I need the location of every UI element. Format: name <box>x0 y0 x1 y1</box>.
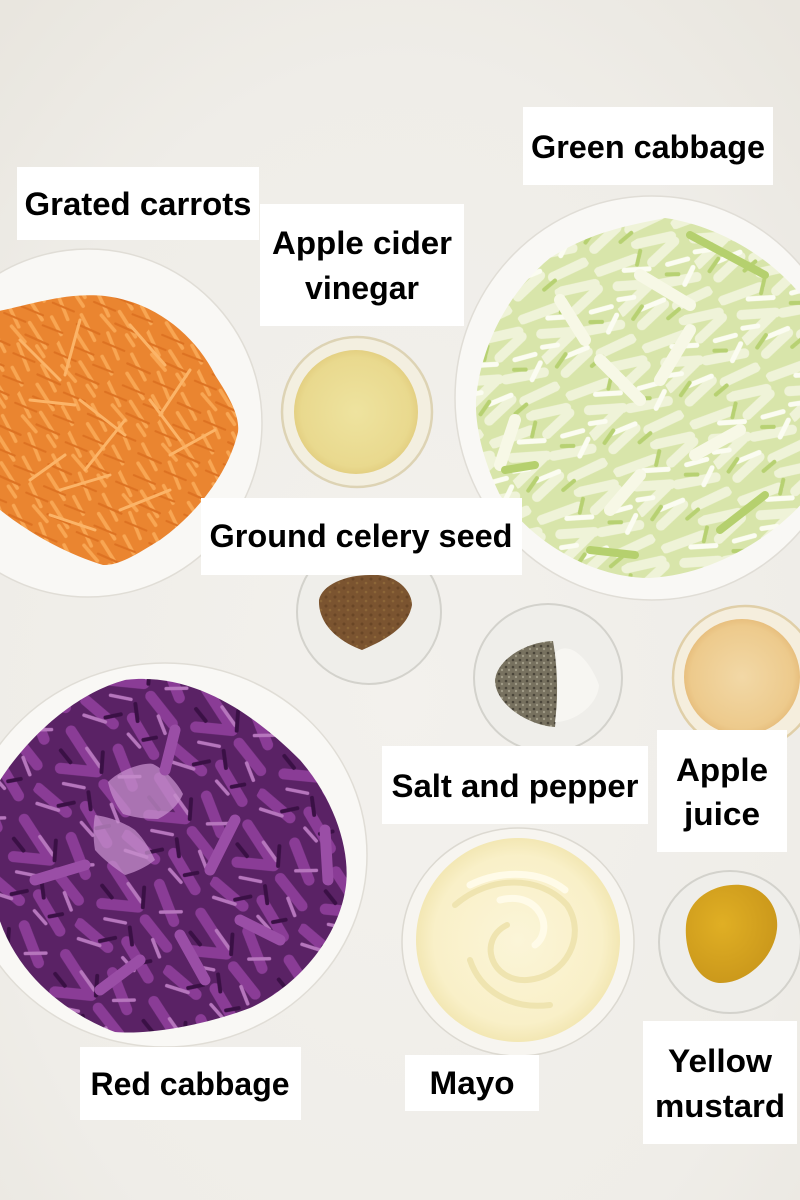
bowl: green cabbage <box>455 196 800 600</box>
label: yellow mustard: mustard <box>655 1088 785 1124</box>
label: yellow mustard <box>643 1021 797 1144</box>
label: mayo <box>405 1055 539 1111</box>
label: ground celery seed <box>201 498 522 575</box>
bowl: apple juice <box>673 606 800 750</box>
label: red cabbage: Red cabbage <box>90 1066 290 1102</box>
label: red cabbage <box>80 1047 301 1120</box>
label: apple juice: juice <box>683 796 760 832</box>
bowl: red cabbage <box>0 663 367 1047</box>
label: salt and pepper: Salt and pepper <box>392 768 638 804</box>
bowl: apple cider vinegar <box>282 337 432 487</box>
bowl: mayo <box>402 828 634 1056</box>
label: grated carrots: Grated carrots <box>24 186 251 222</box>
label: apple cider vinegar: vinegar <box>305 270 419 306</box>
label: yellow mustard: Yellow <box>668 1043 772 1079</box>
label: mayo: Mayo <box>430 1065 514 1101</box>
bowl: grated carrots <box>0 249 262 597</box>
bowl: salt and pepper <box>474 604 622 752</box>
label: grated carrots <box>17 167 259 240</box>
bowl: yellow mustard <box>659 871 800 1013</box>
label: ground celery seed: Ground celery seed <box>210 518 512 554</box>
label: green cabbage <box>523 107 773 185</box>
label: green cabbage: Green cabbage <box>531 129 765 165</box>
label: apple cider vinegar: Apple cider <box>272 225 452 261</box>
label: apple juice: Apple <box>676 752 768 788</box>
bowl: ground celery seed <box>297 540 441 684</box>
label: apple juice <box>657 730 787 852</box>
label: salt and pepper <box>382 746 648 824</box>
label: apple cider vinegar <box>260 204 464 326</box>
